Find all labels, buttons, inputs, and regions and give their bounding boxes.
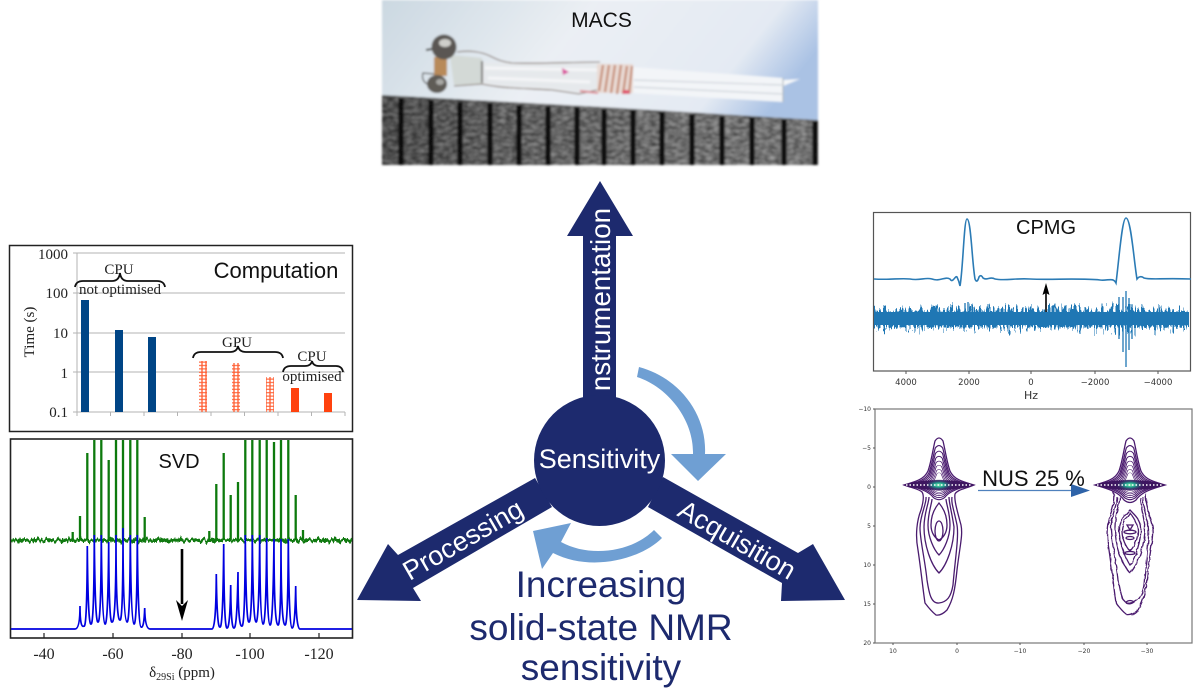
coil support beads <box>422 34 456 93</box>
arrow: SVD downwards <box>176 549 188 621</box>
axis ticks and labels: 10 <box>889 648 897 655</box>
y axis labels <box>38 247 68 421</box>
arrow: Instrumentation <box>567 181 633 400</box>
axis ticks and labels <box>858 406 1154 655</box>
arrow: Acquisition <box>648 477 845 601</box>
panel: NUS contour plots <box>858 406 1192 655</box>
x axis ticks and labels: 4000 <box>895 378 917 388</box>
axis ticks and labels: −10 <box>1014 648 1027 655</box>
x axis title: 29Si <box>156 672 175 683</box>
arrow: clockwise curve bottom <box>533 523 662 569</box>
axis ticks and labels: −30 <box>1141 648 1154 655</box>
axis ticks and labels: −10 <box>858 406 871 413</box>
x axis ticks and labels <box>33 633 334 663</box>
processed CPMG trace <box>874 218 1191 286</box>
x axis ticks and labels: 2000 <box>958 378 980 388</box>
CPMG label: CPMG <box>1016 217 1076 239</box>
arrow: NUS <box>978 484 1090 497</box>
axis ticks and labels: −20 <box>1078 648 1091 655</box>
title: sensitivity <box>521 647 682 688</box>
capillary tube <box>450 51 800 102</box>
arrow: CPMG upwards <box>1042 283 1050 312</box>
NUS label: NUS 25 % <box>982 466 1085 491</box>
bars: CPU optimised <box>291 388 332 412</box>
x axis title: (ppm) <box>174 665 215 681</box>
braces <box>75 273 343 372</box>
label: Acquisition: Acquisition <box>673 494 801 586</box>
y axis labels: 10 <box>53 326 68 342</box>
y axis labels: 100 <box>46 286 68 302</box>
x axis ticks and labels: −2000 <box>1081 378 1109 388</box>
axis ticks and labels: 0 <box>867 484 871 491</box>
x axis ticks and labels: -60 <box>102 646 124 663</box>
panel: MACS photograph <box>382 0 818 165</box>
green noisy spectrum <box>4 440 360 542</box>
arrow: clockwise curve upper right <box>637 367 726 481</box>
panel: Computation bar chart <box>10 246 352 432</box>
group labels <box>79 262 342 385</box>
group labels: CPU <box>297 349 327 365</box>
label: Sensitivity: Sensitivity <box>539 444 661 474</box>
label: Instrumentation: Instrumentation <box>585 208 616 399</box>
title: Increasing <box>516 564 686 605</box>
x axis ticks and labels: 0 <box>1028 378 1034 388</box>
x axis ticks and labels: -100 <box>235 646 265 663</box>
contour plot: fully sampled <box>904 438 974 615</box>
y axis labels: 1000 <box>38 247 68 263</box>
axis ticks and labels: 0 <box>955 648 959 655</box>
title: solid-state NMR <box>469 607 733 648</box>
panel: CPMG spectrum <box>866 212 1196 402</box>
chart title: Computation <box>214 258 338 283</box>
copper coil <box>580 64 633 94</box>
group labels: CPU <box>104 262 134 278</box>
x axis title: δ <box>149 665 156 681</box>
noisy CPMG trace <box>866 291 1196 367</box>
x axis ticks and labels <box>895 371 1172 388</box>
title <box>469 564 733 688</box>
ruler <box>382 95 818 165</box>
arrow: Processing <box>357 478 552 601</box>
group labels: not optimised <box>79 282 162 298</box>
x axis title: Hz <box>1024 389 1038 402</box>
x axis ticks and labels: -120 <box>304 646 334 663</box>
axis ticks and labels: 10 <box>863 562 871 569</box>
label: Processing: Processing <box>398 494 528 586</box>
hub circle <box>534 395 665 526</box>
axis ticks and labels: 5 <box>867 523 871 530</box>
SVD label: SVD <box>158 451 200 473</box>
group labels: optimised <box>282 369 342 385</box>
central diagram: arrows and hub <box>357 181 845 601</box>
grid lines <box>73 253 345 412</box>
contour plot: NUS 25 % <box>1095 438 1165 615</box>
x axis ticks and labels: -80 <box>171 646 193 663</box>
axis ticks and labels: 20 <box>863 640 871 647</box>
MACS label: MACS <box>571 9 632 32</box>
axis ticks and labels: 15 <box>863 601 871 608</box>
y axis labels: 0.1 <box>49 405 68 421</box>
bars: CPU not optimised <box>81 300 156 412</box>
axis ticks and labels: −5 <box>862 445 871 452</box>
x axis ticks and labels: −4000 <box>1144 378 1172 388</box>
bars: GPU <box>199 361 274 412</box>
panel: SVD spectra <box>4 439 360 683</box>
x axis ticks and labels: -40 <box>33 646 55 663</box>
y axis labels: 1 <box>60 366 68 382</box>
blue fitted spectrum <box>11 528 352 629</box>
group labels: GPU <box>222 335 252 351</box>
y axis title: Time (s) <box>22 307 38 357</box>
